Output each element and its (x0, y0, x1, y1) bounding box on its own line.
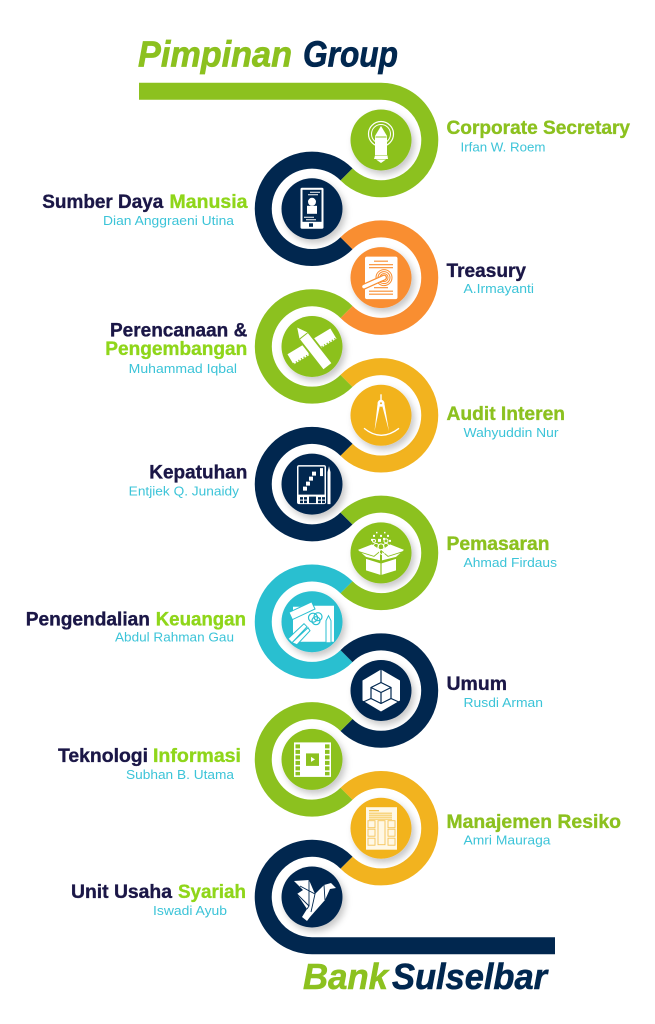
ribbon segment: kepatuhan (263, 435, 346, 533)
label: audit interen: Audit Interen (446, 403, 565, 425)
label: sumber daya manusia (42, 191, 248, 228)
icon: tablet with stairs and stylus (282, 454, 342, 515)
label: treasury: Treasury (446, 260, 526, 282)
icon: origami bird (282, 866, 342, 928)
label: perencanaan dan pengembangan: Muhammad Iqbal (129, 361, 237, 376)
label: pengendalian keuangan: Pengendalian (26, 609, 150, 631)
ribbon segment: umum (346, 642, 430, 739)
label: treasury (446, 260, 534, 296)
label: teknologi informasi: Subhan B. Utama (126, 767, 235, 782)
label: pengendalian keuangan: Keuangan (156, 609, 246, 631)
label: sumber daya manusia: Dian Anggraeni Utina (103, 213, 235, 228)
label: manajemen resiko (446, 811, 621, 848)
ribbon segment: sumber daya manusia (263, 160, 346, 258)
label: teknologi informasi: Teknologi (58, 745, 148, 767)
label: sumber daya manusia: Sumber Daya (42, 191, 163, 213)
title (138, 34, 398, 74)
label: manajemen resiko: Amri Mauraga (464, 832, 551, 848)
icon: report document (350, 798, 412, 859)
label: kepatuhan: Entjiek Q. Junaidy (129, 484, 240, 498)
label: pemasaran: Pemasaran (446, 533, 550, 555)
ribbon segment: perencanaan (263, 298, 346, 395)
label: unit usaha syariah: Iswadi Ayub (153, 903, 227, 918)
ribbon segment: manajemen resiko (346, 779, 430, 877)
ribbon segment: audit interen (346, 367, 430, 464)
icon: smartphone with profile (282, 178, 342, 239)
icon: crossed ruler and pencil (282, 316, 342, 377)
title: Group (303, 34, 398, 74)
ribbon segment: treasury (346, 229, 430, 326)
label: audit interen: Wahyuddin Nur (464, 425, 559, 440)
label: corporate secretary: Corporate Secretary (446, 117, 630, 139)
icon: film strip with play button (282, 729, 342, 790)
icon: fingerprint document (350, 247, 412, 308)
label: unit usaha syariah (71, 881, 246, 918)
ribbon segment: unit usaha syariah (263, 848, 555, 946)
label: sumber daya manusia: Manusia (170, 191, 248, 213)
title: Pimpinan (138, 34, 292, 74)
label: audit interen (446, 403, 565, 440)
label: kepatuhan (129, 461, 247, 498)
label: teknologi informasi (58, 745, 241, 782)
label: umum: Rusdi Arman (464, 695, 543, 710)
label: teknologi informasi: Informasi (153, 745, 241, 767)
label: umum: Umum (446, 673, 507, 695)
logo: Bank Sulselbar: Bank (303, 956, 390, 997)
label: pemasaran: Ahmad Firdaus (464, 555, 558, 570)
icon: open box with sparkles (350, 522, 412, 583)
label: corporate secretary: Irfan W. Roem (460, 140, 546, 154)
label: perencanaan dan pengembangan: Pengembangan (105, 338, 247, 360)
label: pengendalian keuangan (26, 609, 246, 645)
label: perencanaan dan pengembangan: Perencanaan & (110, 320, 247, 342)
icon: cube in hexagon (350, 660, 412, 721)
icon: drawing paper with ruler and pencils (282, 591, 342, 652)
label: umum (446, 673, 543, 710)
ribbon segment: pemasaran (346, 504, 430, 602)
icon: light bulb with pencil (350, 110, 412, 170)
label: perencanaan dan pengembangan (105, 320, 247, 376)
label: pengendalian keuangan: Abdul Rahman Gau (115, 630, 234, 645)
winding ribbon (139, 91, 555, 946)
label: unit usaha syariah: Syariah (178, 881, 246, 903)
label: pemasaran (446, 533, 558, 570)
label: kepatuhan: Kepatuhan (149, 461, 247, 483)
logo: Bank Sulselbar: Sulselbar (392, 956, 549, 997)
ribbon segment: pengendalian keuangan (263, 573, 346, 670)
label: manajemen resiko: Manajemen Resiko (446, 811, 621, 833)
label: unit usaha syariah: Unit Usaha (71, 881, 172, 903)
ribbon segment: teknologi informasi (263, 711, 346, 808)
logo: Bank Sulselbar (303, 956, 549, 997)
label: treasury: A.Irmayanti (464, 281, 534, 296)
label: corporate secretary (446, 117, 630, 154)
icon: compass and arc (350, 385, 412, 446)
ribbon segment: corporate secretary (139, 91, 430, 189)
